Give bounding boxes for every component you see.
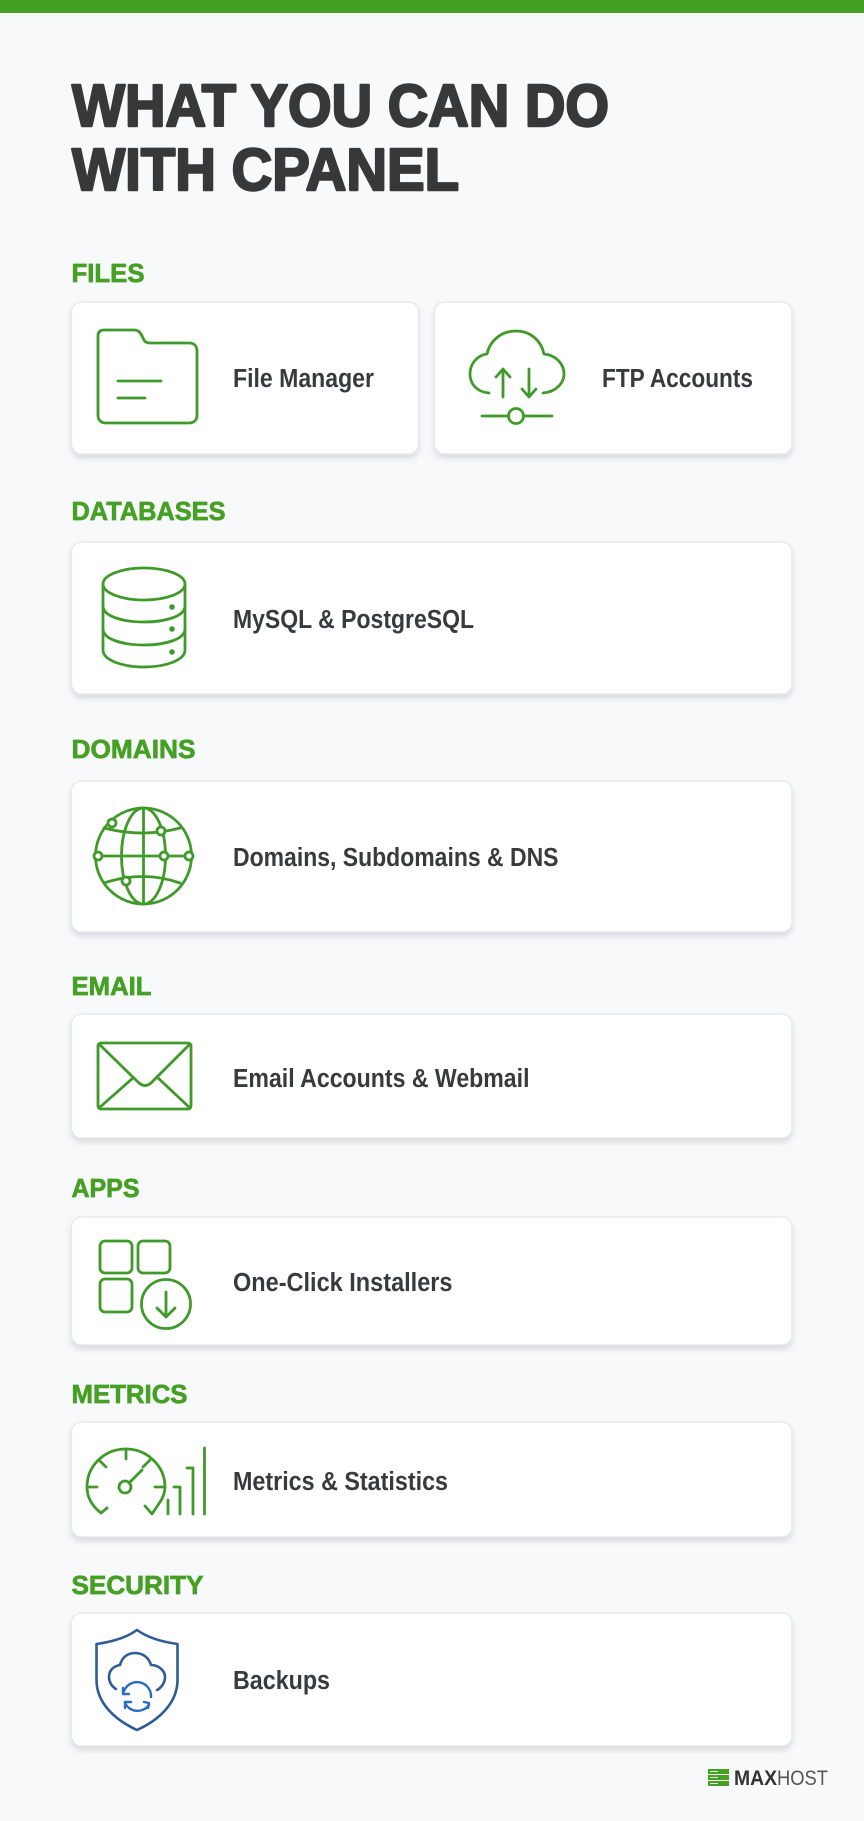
label: apps: One-Click Installers bbox=[233, 1269, 452, 1297]
panel: metrics bbox=[72, 1422, 792, 1537]
title: WITH CPANEL bbox=[72, 137, 459, 203]
panel: domains bbox=[72, 781, 792, 932]
label: security: Backups bbox=[233, 1667, 330, 1695]
icon: server stack bbox=[708, 1769, 729, 1786]
label: databases: MySQL & PostgreSQL bbox=[233, 606, 474, 634]
icon: globe bbox=[94, 808, 193, 904]
heading: apps: APPS bbox=[72, 1173, 140, 1203]
heading: domains: DOMAINS bbox=[72, 734, 196, 764]
heading: security: SECURITY bbox=[72, 1570, 204, 1600]
panel: apps bbox=[72, 1217, 792, 1345]
icon: folder bbox=[98, 330, 197, 423]
logo: maxhost bbox=[708, 1767, 828, 1790]
label: ftp accounts: FTP Accounts bbox=[602, 365, 753, 393]
panel: security bbox=[72, 1613, 792, 1746]
heading: metrics: METRICS bbox=[72, 1379, 188, 1409]
brand name: MAX bbox=[734, 1767, 777, 1790]
heading: email: EMAIL bbox=[72, 971, 152, 1001]
panel: file manager bbox=[72, 302, 418, 454]
title bbox=[72, 73, 609, 203]
icon: envelope bbox=[98, 1043, 191, 1109]
label: email: Email Accounts & Webmail bbox=[233, 1065, 530, 1093]
icon: apps grid with download bbox=[100, 1241, 190, 1328]
icon: shield with cloud backup bbox=[96, 1630, 178, 1730]
heading: files: FILES bbox=[72, 258, 144, 288]
icon: cloud transfer bbox=[470, 331, 564, 424]
heading: databases: DATABASES bbox=[72, 496, 226, 526]
top green bar bbox=[0, 0, 864, 13]
logo: maxhost: HOST bbox=[777, 1767, 828, 1790]
label: domains: Domains, Subdomains & DNS bbox=[233, 844, 558, 872]
icon: gauge and bars bbox=[87, 1448, 204, 1514]
panel: email bbox=[72, 1014, 792, 1138]
panel: databases bbox=[72, 542, 792, 694]
label: metrics: Metrics & Statistics bbox=[233, 1468, 448, 1496]
label: file manager: File Manager bbox=[233, 365, 374, 393]
icon: database bbox=[103, 568, 185, 667]
title: WHAT YOU CAN DO bbox=[72, 73, 609, 139]
panel: ftp accounts bbox=[434, 302, 792, 454]
